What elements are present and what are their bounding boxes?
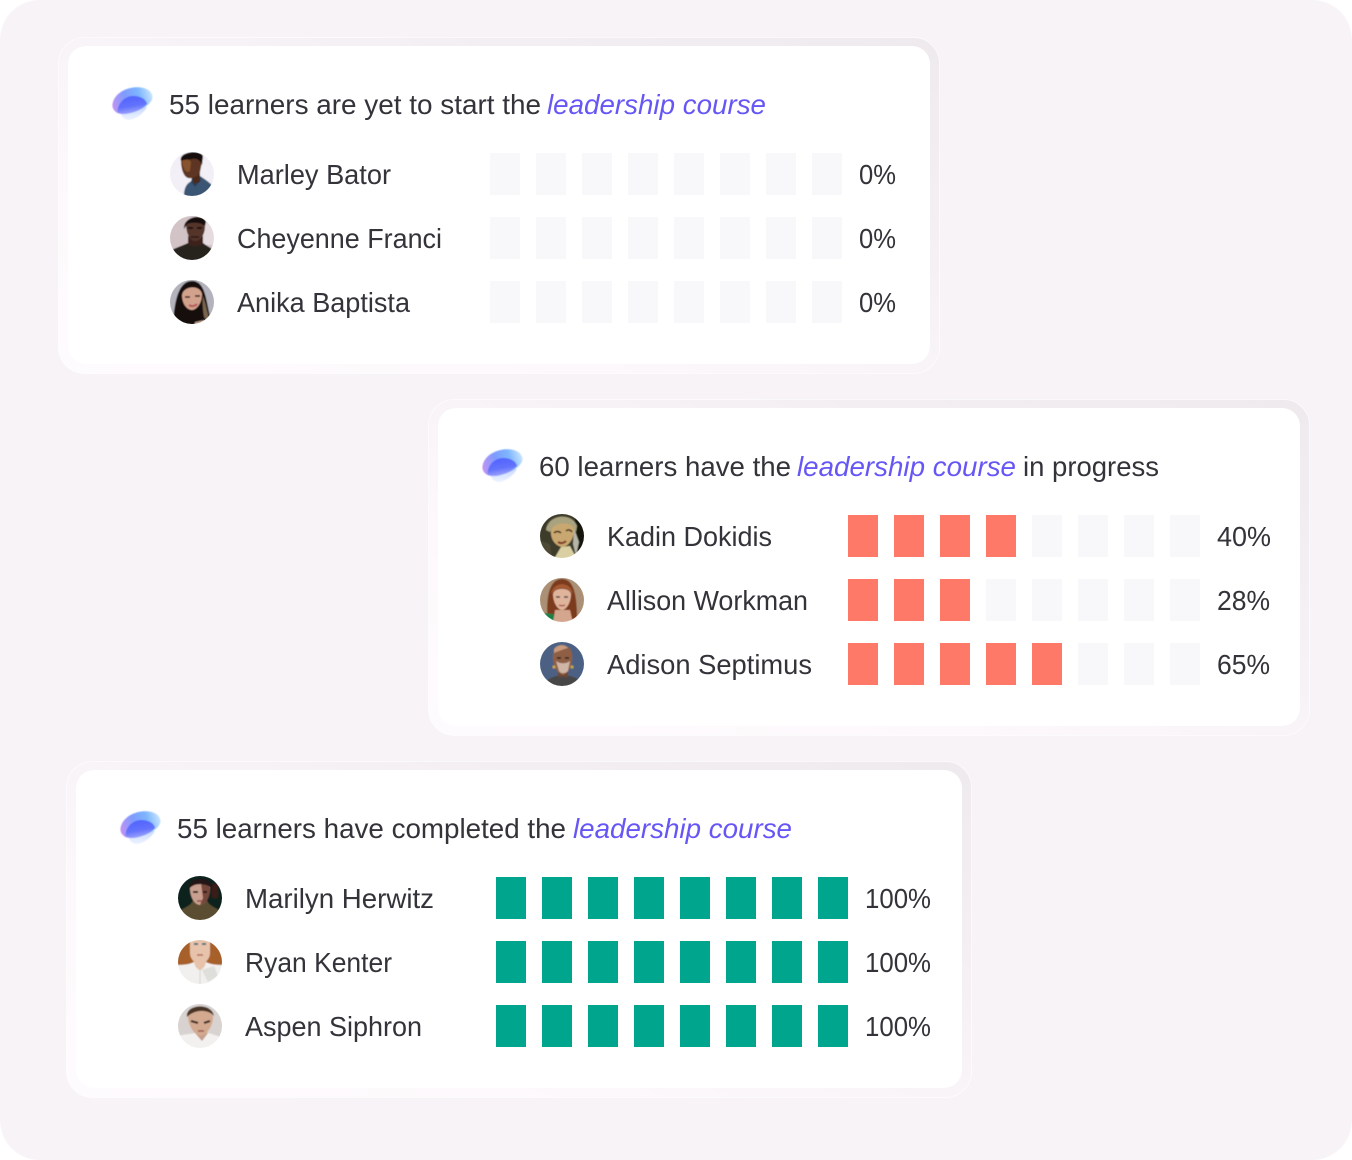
value: Marley Bator: 0%: [859, 159, 896, 190]
name: Kadin Dokidis: Kadin Dokidis: [607, 521, 772, 552]
heading: completed: 55 learners have completed the: [177, 813, 566, 844]
panel: completed: [66, 762, 972, 1098]
avatar: Kadin Dokidis: [539, 513, 585, 559]
icon: blob logo: [482, 449, 522, 482]
name: Ryan Kenter: Ryan Kenter: [245, 947, 392, 978]
icon: blob logo: [120, 811, 160, 844]
icon: blob logo: [112, 87, 152, 120]
progress: Marley Bator: [490, 153, 842, 195]
heading: in progress: [539, 451, 1159, 482]
heading: in progress: in progress: [1023, 451, 1159, 482]
heading: in progress: leadership course: [797, 451, 1016, 482]
value: Allison Workman: 28%: [1217, 585, 1270, 616]
avatar: Aspen Siphron: [177, 1003, 223, 1049]
heading: completed: [177, 813, 792, 844]
name: Cheyenne Franci: Cheyenne Franci: [237, 223, 442, 254]
progress: Ryan Kenter: [496, 941, 848, 983]
progress: Kadin Dokidis: [848, 515, 1200, 557]
value: Adison Septimus: 65%: [1217, 649, 1270, 680]
avatar: Adison Septimus: [539, 641, 585, 687]
progress: Allison Workman: [848, 579, 1200, 621]
value: Cheyenne Franci: 0%: [859, 223, 896, 254]
progress: Adison Septimus: [848, 643, 1200, 685]
value: Aspen Siphron: 100%: [865, 1011, 931, 1042]
avatar: Anika Baptista: [169, 279, 215, 325]
name: Aspen Siphron: Aspen Siphron: [245, 1011, 422, 1042]
name: Marley Bator: Marley Bator: [237, 159, 391, 190]
heading: in progress: 60 learners have the: [539, 451, 791, 482]
name: Allison Workman: Allison Workman: [607, 585, 808, 616]
heading: not started: 55 learners are yet to start the: [169, 89, 541, 120]
value: Ryan Kenter: 100%: [865, 947, 931, 978]
avatar: Ryan Kenter: [177, 939, 223, 985]
progress: Anika Baptista: [490, 281, 842, 323]
avatar: Cheyenne Franci: [169, 215, 215, 261]
avatar: Marley Bator: [169, 151, 215, 197]
name: Adison Septimus: Adison Septimus: [607, 649, 812, 680]
heading: completed: leadership course: [573, 813, 792, 844]
progress: Cheyenne Franci: [490, 217, 842, 259]
panel: not started: [58, 38, 940, 374]
value: Kadin Dokidis: 40%: [1217, 521, 1271, 552]
panel: in progress: [428, 400, 1310, 736]
value: Marilyn Herwitz: 100%: [865, 883, 931, 914]
avatar: Marilyn Herwitz: [177, 875, 223, 921]
progress: Marilyn Herwitz: [496, 877, 848, 919]
value: Anika Baptista: 0%: [859, 287, 896, 318]
progress: Aspen Siphron: [496, 1005, 848, 1047]
heading: not started: [169, 89, 766, 120]
name: Anika Baptista: Anika Baptista: [237, 287, 410, 318]
heading: not started: leadership course: [547, 89, 766, 120]
avatar: Allison Workman: [539, 577, 585, 623]
name: Marilyn Herwitz: Marilyn Herwitz: [245, 883, 434, 914]
